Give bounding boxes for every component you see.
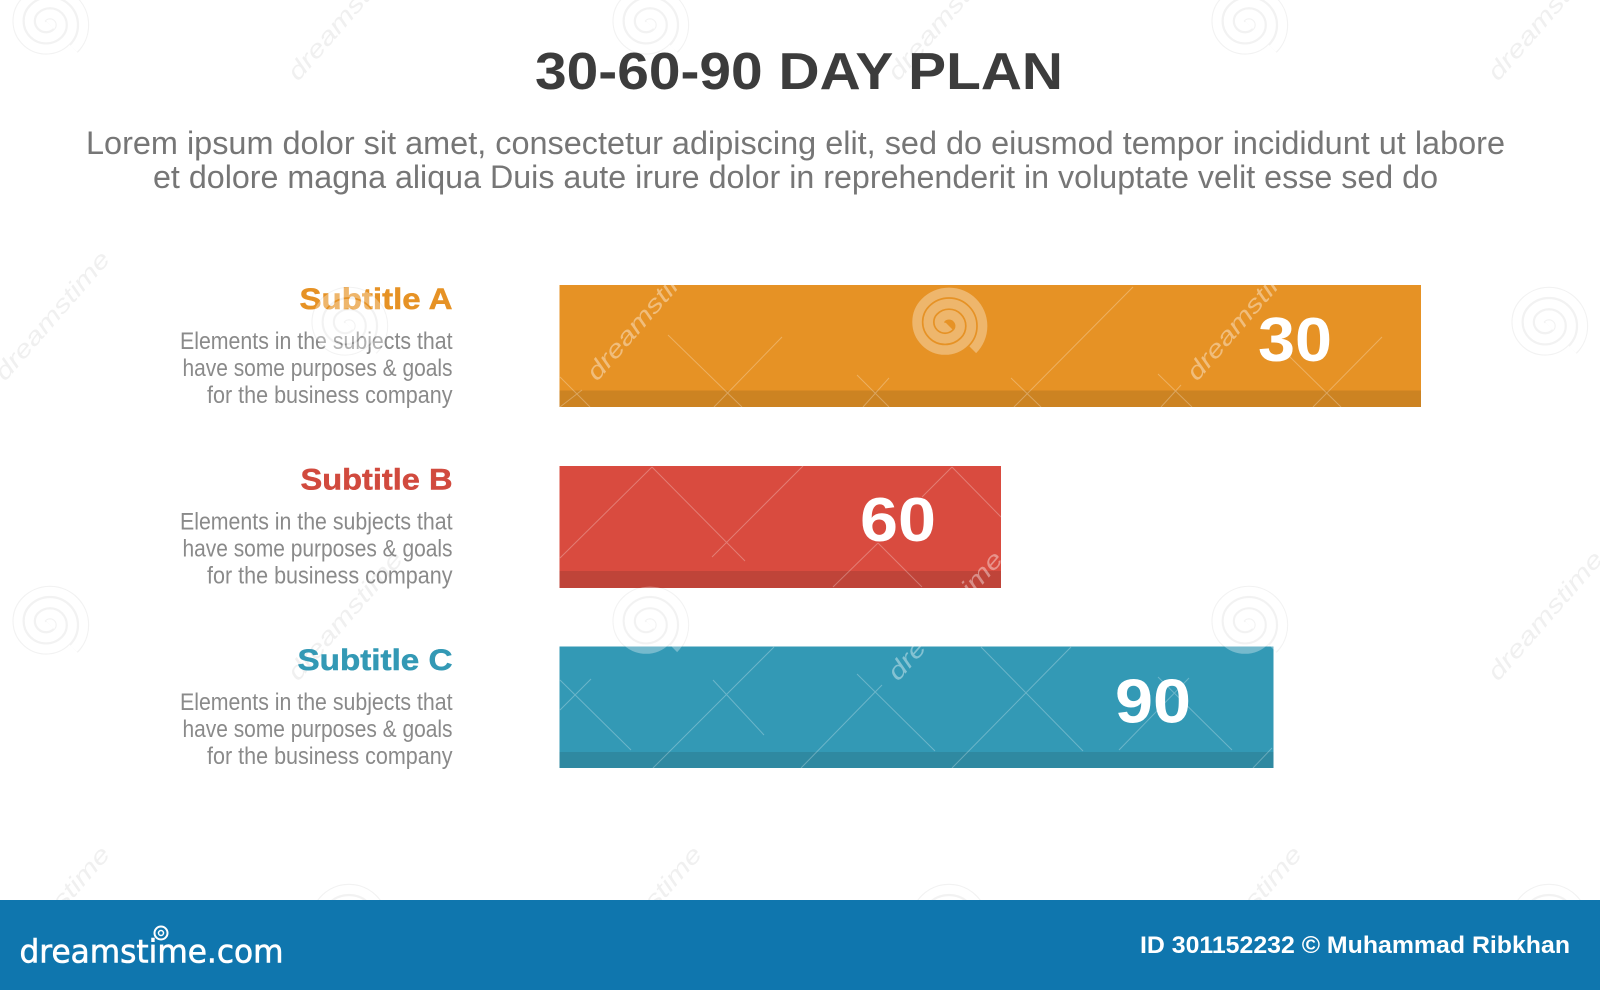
description: subtitle B: have some purposes & goals <box>182 536 452 562</box>
text: dreamstime <box>282 546 409 686</box>
description: subtitle B <box>180 508 453 590</box>
description: subtitle A <box>180 328 453 409</box>
footer band <box>0 900 1600 990</box>
text: dreamstime <box>581 841 708 981</box>
label block: subtitle B <box>180 464 453 590</box>
text: dreamstime <box>1482 546 1600 686</box>
description: subtitle B: for the business company <box>207 562 452 590</box>
bar: 60 days <box>560 466 1001 588</box>
title: 30-60-90 DAY PLAN <box>535 43 1063 101</box>
value: 60: 60 <box>860 486 936 555</box>
value: 30: 30 <box>1258 306 1332 375</box>
footer logo: dreamstime.com <box>20 932 284 970</box>
bar: 30 days <box>560 285 1421 407</box>
heading: subtitle C: Subtitle C <box>298 644 452 677</box>
intro text block <box>86 125 1505 195</box>
value: 90: 90 <box>1115 668 1191 736</box>
text: dreamstime <box>882 546 1009 686</box>
description: subtitle C: Elements in the subjects that <box>180 689 453 716</box>
label block: subtitle A <box>180 283 453 409</box>
description: subtitle C: have some purposes & goals <box>182 716 452 743</box>
description: subtitle C <box>180 689 453 770</box>
description: subtitle B: Elements in the subjects that <box>180 508 453 536</box>
text: dreamstime <box>581 246 708 386</box>
bar: 90 days <box>560 646 1274 768</box>
footer credit: ID 301152232 © Muhammad Ribkhan <box>1140 932 1570 959</box>
intro text block: et dolore magna aliqua Duis aute irure dolor in reprehenderit in voluptate velit esse sed do <box>153 159 1438 195</box>
description: subtitle A: Elements in the subjects that <box>180 328 453 355</box>
description: subtitle A: for the business company <box>207 382 452 409</box>
intro text block: Lorem ipsum dolor sit amet, consectetur adipiscing elit, sed do eiusmod tempor incididunt ut labore <box>86 125 1505 161</box>
label block: subtitle C <box>180 644 453 770</box>
description: subtitle A: have some purposes & goals <box>182 355 452 382</box>
text: dreamstime <box>1181 841 1308 981</box>
description: subtitle C: for the business company <box>207 743 452 770</box>
heading: subtitle B: Subtitle B <box>300 464 452 496</box>
heading: subtitle A: Subtitle A <box>300 283 452 316</box>
text: dreamstime <box>1181 246 1308 386</box>
